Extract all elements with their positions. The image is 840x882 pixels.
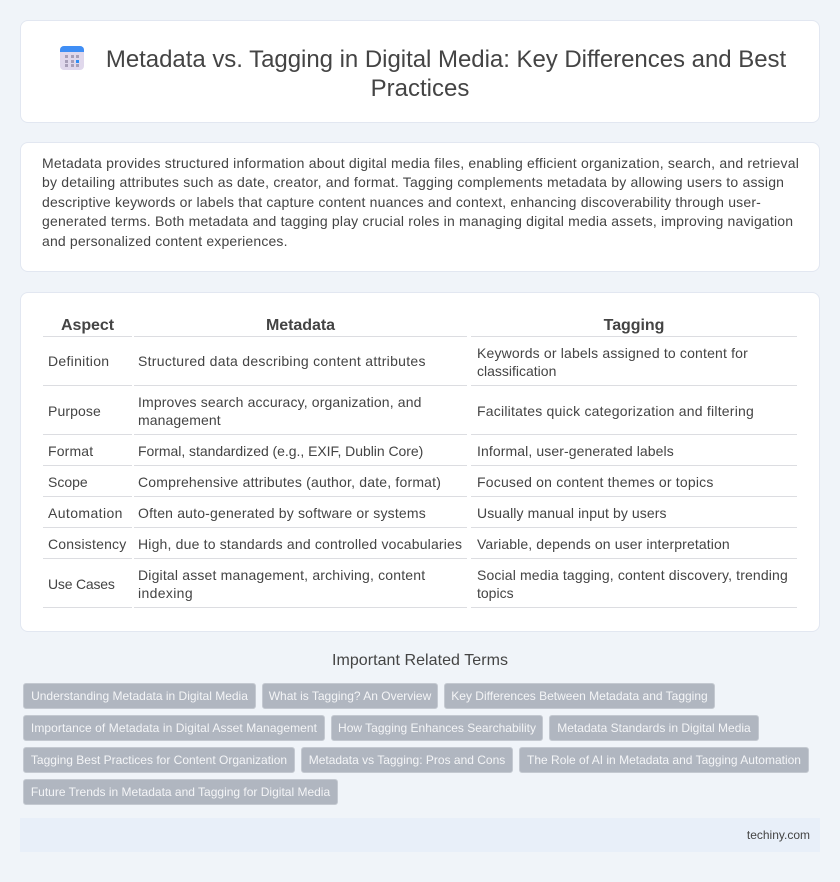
row: Format: Formal, standardized (e.g., EXIF, Dublin Core) (138, 443, 423, 459)
title: Metadata vs. Tagging in Digital Media: Key Differences and Best (106, 46, 786, 73)
row: Consistency: High, due to standards and controlled vocabularies (138, 536, 462, 552)
row: Use Cases (48, 567, 788, 601)
row: Format: Informal, user-generated labels (477, 443, 674, 459)
row: Consistency (48, 536, 730, 552)
related term tags: How Tagging Enhances Searchability (338, 721, 536, 735)
related term tags: Metadata Standards in Digital Media (557, 721, 751, 735)
related term tags: Key Differences Between Metadata and Tagging (451, 689, 708, 703)
related term tags: Understanding Metadata in Digital Media (31, 689, 248, 703)
row: Use Cases: indexing (138, 585, 193, 601)
related term tags (23, 683, 809, 805)
row: Automation (48, 505, 667, 521)
description text: generated terms. Both metadata and tagging play crucial roles in managing digital media assets, improving navigation (42, 213, 793, 229)
heading: related terms: Important Related Terms (332, 652, 508, 669)
row: Consistency: Consistency (48, 536, 126, 552)
row: Purpose: Purpose (48, 403, 101, 419)
description text: Metadata provides structured information about digital media files, enabling efficient organization, search, and retrieval (42, 155, 799, 171)
panel: comparison table (20, 292, 820, 632)
row: Scope: Scope (48, 474, 88, 490)
row: Purpose: Facilitates quick categorization and filtering (477, 403, 754, 419)
table header: Metadata (266, 317, 335, 334)
row: Purpose: Improves search accuracy, organization, and (138, 394, 422, 410)
row: Definition: Keywords or labels assigned to content for (477, 345, 748, 361)
table header (61, 317, 664, 334)
table header: Aspect (61, 317, 114, 334)
row: Scope (48, 474, 714, 490)
row: Purpose: management (138, 412, 221, 428)
description text: by detailing attributes such as date, creator, and format. Tagging complements metadata by allowing users to assign (42, 174, 784, 190)
row: Automation: Usually manual input by users (477, 505, 667, 521)
row: Use Cases: Use Cases (48, 576, 115, 592)
icon: calendar (60, 46, 84, 70)
related term tags: The Role of AI in Metadata and Tagging Automation (527, 753, 801, 767)
related term tags: Importance of Metadata in Digital Asset Management (31, 721, 317, 735)
row: Use Cases: topics (477, 585, 514, 601)
row: Use Cases: Digital asset management, archiving, content (138, 567, 425, 583)
row: Definition: Definition (48, 353, 109, 369)
footer bar (20, 818, 820, 852)
row: Automation: Automation (48, 505, 123, 521)
related term tags: Metadata vs Tagging: Pros and Cons (309, 753, 505, 767)
row: Format (48, 443, 674, 459)
title (106, 46, 786, 102)
panel: header (20, 20, 820, 123)
description text: and personalized content experiences. (42, 233, 288, 249)
description text: descriptive keywords or labels that capture content nuances and context, enhancing discoverability through user- (42, 194, 761, 210)
related term tags: Future Trends in Metadata and Tagging for Digital Media (31, 785, 330, 799)
row: Definition: Structured data describing content attributes (138, 353, 426, 369)
row: Definition (48, 345, 748, 379)
title: Practices (371, 75, 469, 102)
row: Consistency: Variable, depends on user interpretation (477, 536, 730, 552)
row: Use Cases: Social media tagging, content discovery, trending (477, 567, 788, 583)
related term tags: Tagging Best Practices for Content Organization (31, 753, 287, 767)
footer source: techiny.com (747, 828, 810, 842)
table header: Tagging (604, 317, 664, 334)
row: Purpose (48, 394, 754, 428)
row: Scope: Focused on content themes or topics (477, 474, 714, 490)
row: Automation: Often auto-generated by software or systems (138, 505, 426, 521)
description text (42, 155, 799, 249)
row: Scope: Comprehensive attributes (author, date, format) (138, 474, 441, 490)
row: Definition: classification (477, 363, 556, 379)
row: Format: Format (48, 443, 93, 459)
panel: description (20, 142, 820, 272)
related term tags: What is Tagging? An Overview (269, 689, 431, 703)
